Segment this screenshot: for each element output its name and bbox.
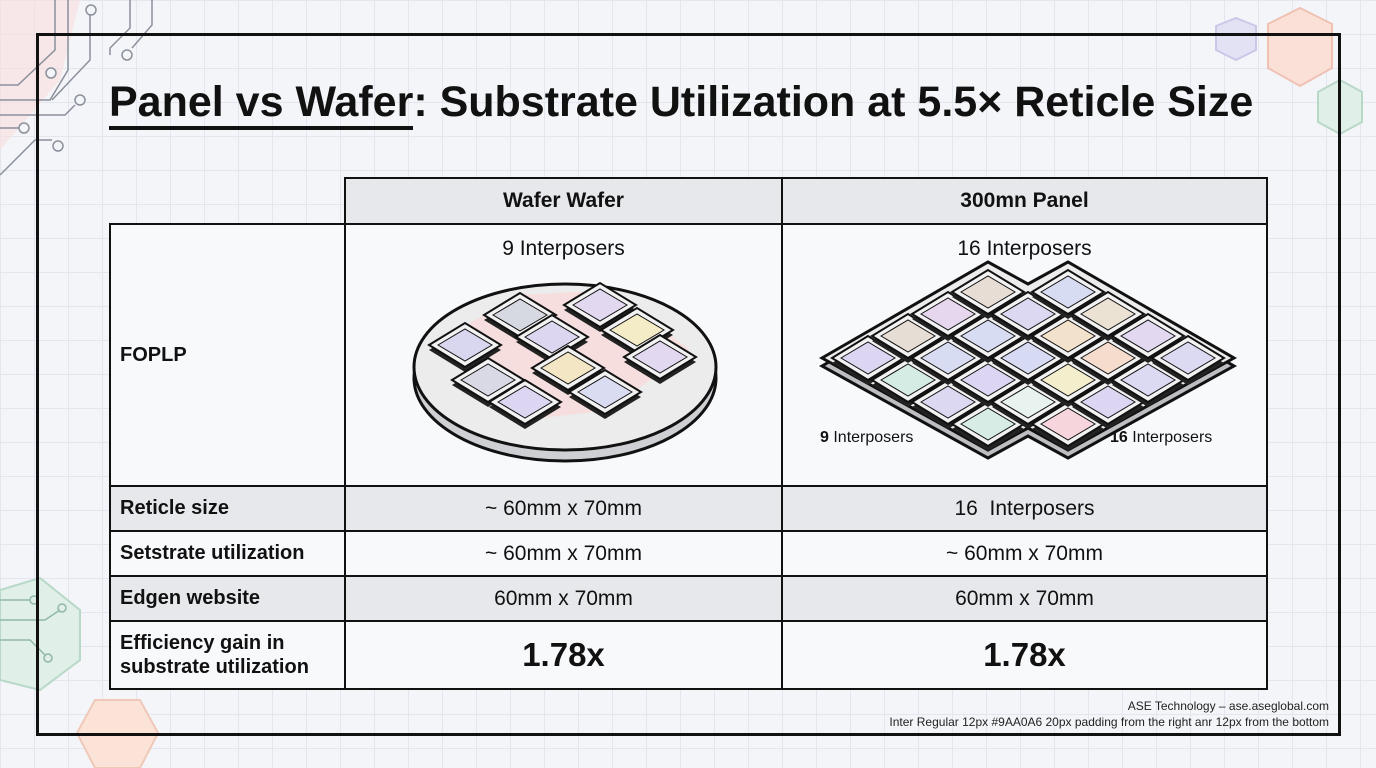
comparison table: 1.78x bbox=[983, 636, 1066, 673]
comparison table: Reticle size bbox=[120, 497, 229, 519]
comparison table bbox=[109, 177, 1268, 690]
comparison table: Edgen website bbox=[120, 587, 260, 609]
comparison table: 9 Interposers bbox=[502, 237, 625, 260]
comparison table: 300mn Panel bbox=[960, 189, 1089, 212]
comparison table: Efficiency gain in substrate utilization bbox=[120, 632, 309, 678]
comparison table: 60mm x 70mm bbox=[494, 586, 633, 610]
panel labels: 9 Interposers bbox=[820, 429, 913, 446]
title: Panel vs Wafer: Substrate Utilization at 5.5× Reticle Size bbox=[109, 78, 1253, 126]
comparison table: 60mm x 70mm bbox=[955, 586, 1094, 610]
comparison table: ~ 60mm x 70mm bbox=[946, 542, 1103, 564]
comparison table: 16 Interposers bbox=[957, 237, 1092, 260]
comparison table: 1.78x bbox=[522, 636, 605, 673]
comparison table: ~ 60mm x 70mm bbox=[485, 542, 642, 564]
comparison table: Wafer Wafer bbox=[503, 189, 624, 212]
panel illustration bbox=[822, 262, 1234, 458]
comparison table: Setstrate utilization bbox=[120, 542, 304, 564]
wafer illustration bbox=[414, 283, 716, 461]
footer: Inter Regular 12px #9AA0A6 20px padding from the right anr 12px from the bottom bbox=[889, 715, 1329, 729]
comparison table: 16 Interposers bbox=[954, 496, 1095, 520]
comparison table: ~ 60mm x 70mm bbox=[485, 496, 642, 520]
footer bbox=[889, 699, 1329, 729]
panel labels bbox=[820, 429, 1212, 446]
panel labels: 16 Interposers bbox=[1110, 429, 1212, 446]
footer: ASE Technology – ase.aseglobal.com bbox=[1128, 699, 1329, 713]
comparison table: FOPLP bbox=[120, 344, 187, 366]
